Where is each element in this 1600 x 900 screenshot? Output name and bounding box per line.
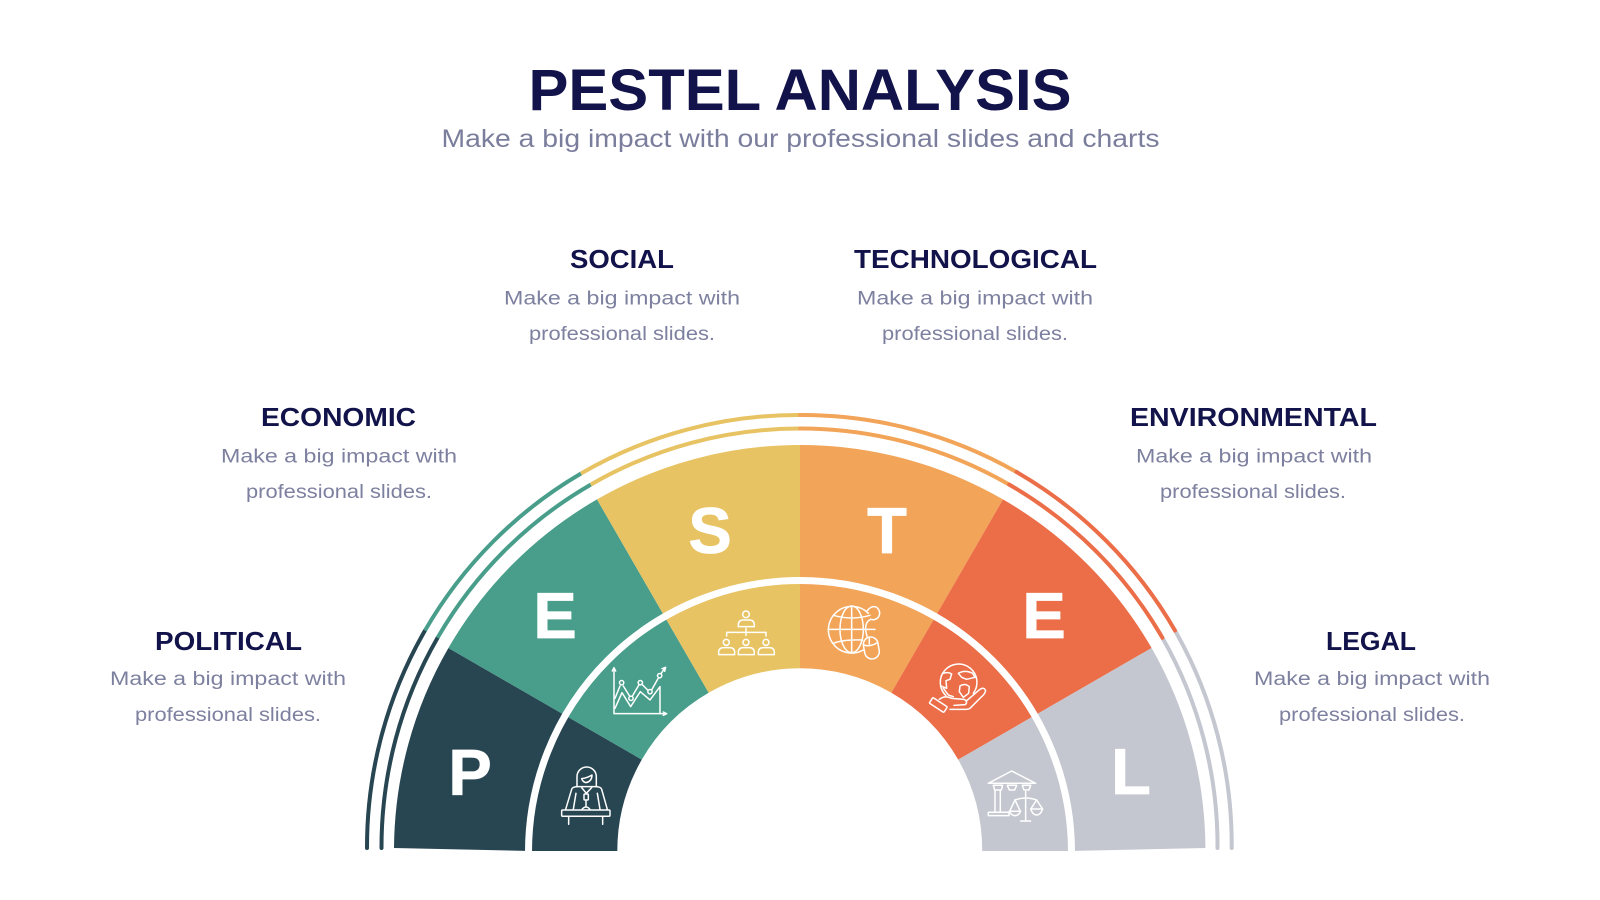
text block: social: professional slides. — [529, 324, 715, 345]
segment: environmental — [891, 499, 1152, 760]
icon: growth chart — [612, 667, 667, 715]
icon: hand holding globe — [929, 664, 986, 713]
text block: political: POLITICAL — [155, 626, 302, 656]
icon: politician at lectern — [562, 767, 610, 824]
inner white ring — [528, 580, 1072, 852]
text block: economic: ECONOMIC — [261, 402, 416, 432]
text block: legal: Make a big impact with — [1254, 669, 1490, 690]
text block: environmental: professional slides. — [1160, 482, 1346, 503]
letter P: P — [448, 736, 492, 809]
text block: legal: LEGAL — [1326, 626, 1416, 656]
text block: environmental — [1130, 402, 1377, 503]
letter E: E — [1022, 579, 1066, 652]
text block: political: professional slides. — [135, 705, 321, 726]
text block: economic: Make a big impact with — [221, 446, 457, 468]
text block: environmental: Make a big impact with — [1136, 446, 1372, 468]
segment: economic — [448, 499, 709, 760]
text block: political — [110, 626, 346, 726]
text block: economic — [221, 402, 457, 503]
title: PESTEL ANALYSIS — [528, 58, 1072, 123]
text block: technological — [854, 244, 1097, 345]
segment: political — [394, 648, 642, 851]
segment: technological — [800, 445, 1003, 693]
text block: social: SOCIAL — [570, 244, 674, 274]
text block: social: Make a big impact with — [504, 288, 740, 310]
text block: political: Make a big impact with — [110, 669, 346, 690]
icon: organisation chart — [719, 611, 774, 655]
icon: courthouse and scales — [988, 771, 1043, 821]
text block: technological: Make a big impact with — [857, 288, 1093, 310]
subtitle: Make a big impact with our professional slides and charts — [442, 125, 1160, 153]
icon: globe with mouse — [828, 606, 880, 660]
letter E: E — [533, 579, 577, 652]
segment: legal — [958, 648, 1205, 851]
outer double arc rings — [367, 415, 1232, 848]
letter L: L — [1111, 735, 1151, 808]
text block: legal: professional slides. — [1279, 705, 1465, 726]
letter S: S — [688, 494, 732, 567]
segment: social — [597, 445, 800, 693]
text block: economic: professional slides. — [246, 482, 432, 503]
text block: legal — [1254, 626, 1490, 726]
text block: technological: TECHNOLOGICAL — [854, 244, 1097, 274]
text block: environmental: ENVIRONMENTAL — [1130, 402, 1377, 432]
text block: technological: professional slides. — [882, 324, 1068, 345]
letter T: T — [867, 494, 907, 567]
text block: social — [504, 244, 740, 345]
